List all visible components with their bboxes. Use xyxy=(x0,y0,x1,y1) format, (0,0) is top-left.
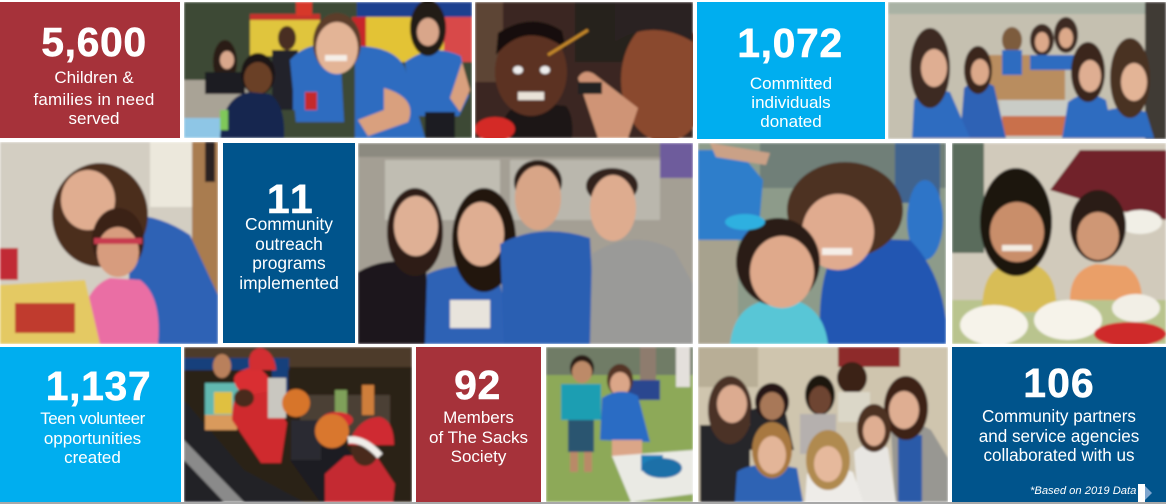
label: outreach programs: programs xyxy=(252,253,326,273)
number: 5,600: 5,600 xyxy=(41,19,147,65)
label: outreach programs: outreach xyxy=(255,234,323,254)
label: committed individuals: donated xyxy=(760,112,822,131)
stat tile: 92 Sacks Society members xyxy=(416,347,541,502)
label: outreach programs: implemented xyxy=(239,272,339,292)
label: teen volunteer opportunities: Teen volunteer xyxy=(40,409,145,428)
label: community partners: and service agencies xyxy=(979,426,1139,446)
photo: group of women volunteers xyxy=(698,347,948,502)
label: teen volunteer opportunities: opportunities xyxy=(44,428,141,448)
photo: volunteers packing boxes xyxy=(888,2,1166,139)
label: community partners: collaborated with us xyxy=(983,446,1135,465)
label: outreach programs: Community xyxy=(245,214,333,234)
stat tile: 1,072 committed individuals xyxy=(697,2,885,139)
label: teen volunteer opportunities xyxy=(40,409,145,467)
label: Sacks Society members: of The Sacks xyxy=(429,428,528,446)
label: Sacks Society members: Members xyxy=(443,408,514,427)
label: Sacks Society members xyxy=(429,408,528,466)
photo: volunteer with face-painted girl xyxy=(698,143,946,344)
number: 92: 92 xyxy=(454,362,501,408)
stat tile: 5,600 children and families xyxy=(0,2,180,138)
photo: boy and volunteer on lawn with cornhole board xyxy=(546,347,693,502)
number: 1,137: 1,137 xyxy=(46,363,151,409)
label: children and families: Children & xyxy=(54,68,134,87)
photo: volunteer with girl and picture book xyxy=(0,142,218,344)
photo: volunteers with boy at bounce house xyxy=(184,2,472,138)
label: children and families: families in need xyxy=(34,90,154,108)
photo: two girls at table with plates xyxy=(952,143,1166,344)
label: community partners xyxy=(979,407,1139,465)
label: teen volunteer opportunities: created xyxy=(64,448,121,467)
label: children and families: served xyxy=(68,109,120,128)
number: 11: 11 xyxy=(267,176,315,222)
photo: four teen volunteers in kitchen xyxy=(358,143,693,344)
label: committed individuals: Committed xyxy=(750,74,832,93)
label: children and families xyxy=(34,68,154,128)
number: 1,072: 1,072 xyxy=(737,20,843,66)
photo: kids playing basketball at holiday party xyxy=(184,347,412,502)
footnote: *Based on 2019 Data xyxy=(1030,485,1136,497)
label: Sacks Society members: Society xyxy=(451,447,506,466)
icon: next arrow xyxy=(1138,484,1152,502)
photo: boy getting face painted xyxy=(475,2,693,138)
label: committed individuals: individuals xyxy=(751,93,831,112)
number: 106: 106 xyxy=(1023,360,1095,406)
stat tile: 11 outreach programs xyxy=(223,143,355,343)
stat tile: 106 community partners xyxy=(952,347,1166,502)
label: community partners: Community partners xyxy=(982,407,1136,426)
stat tile: 1,137 teen volunteer opportunities xyxy=(0,347,181,502)
label: committed individuals xyxy=(750,74,832,131)
label: outreach programs xyxy=(239,214,339,292)
